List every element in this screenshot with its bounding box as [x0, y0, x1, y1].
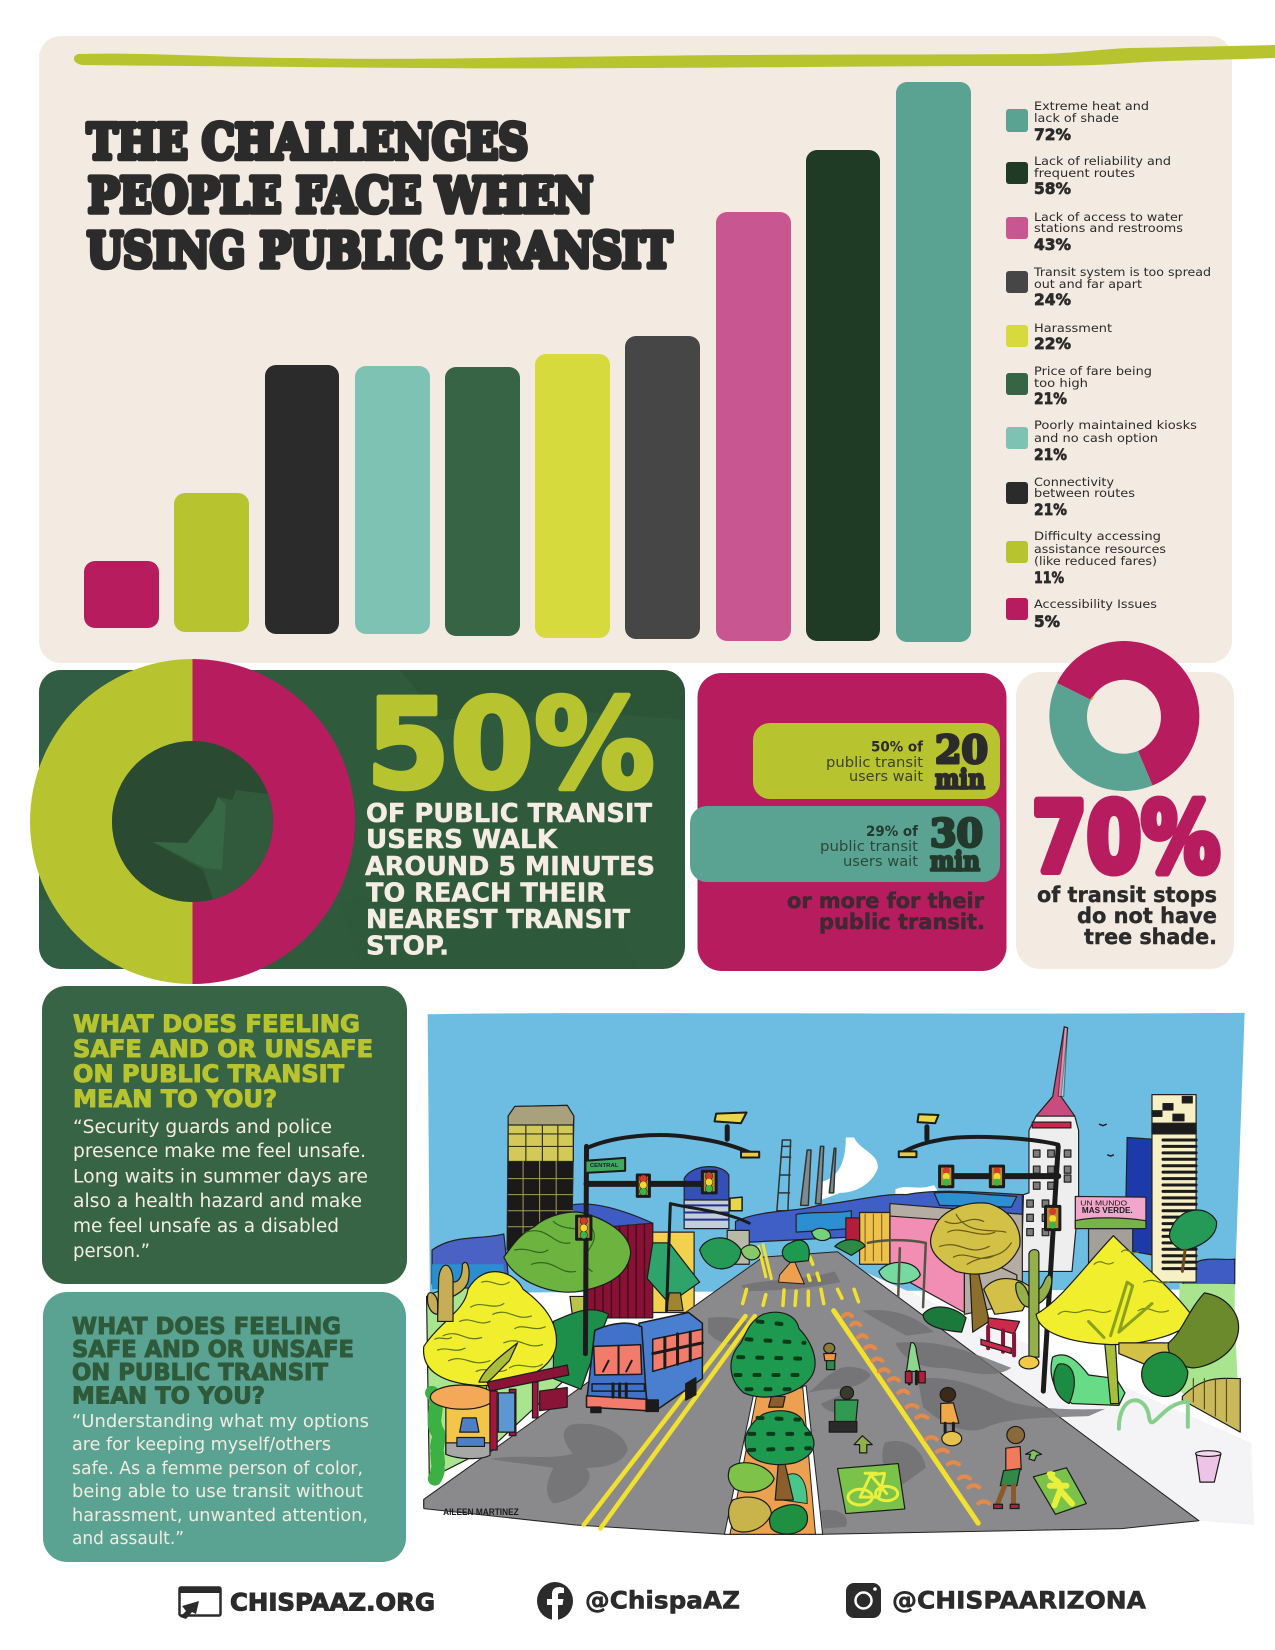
card: 30 minute wait: 30	[930, 810, 983, 856]
legend: frequent routes	[1034, 166, 1135, 180]
clouds	[821, 1137, 940, 1200]
traffic signals: left	[577, 1112, 926, 1354]
legend: 5%	[1034, 612, 1060, 631]
tree shadows on road	[490, 1271, 1105, 1529]
bike lane arrows	[854, 1436, 1042, 1461]
street sign: central: CENTRAL	[590, 1163, 619, 1168]
legend: Harassment	[1034, 321, 1113, 335]
quote one body: Long waits in summer days are	[73, 1166, 368, 1188]
legend: and no cash option	[1034, 431, 1158, 445]
building: white art deco tower	[1021, 1027, 1079, 1271]
wait caption: public transit.	[819, 910, 985, 934]
card: 30 minute wait: users wait	[843, 854, 919, 870]
trees and fence: right edge	[1119, 1293, 1240, 1432]
photo texture	[39, 670, 685, 969]
legend: Lack of access to water	[1034, 210, 1183, 224]
quote one heading	[73, 1010, 373, 1113]
walk description: OF PUBLIC TRANSIT	[366, 799, 652, 829]
card: 30 minute wait: public transit	[820, 839, 919, 855]
bar chart	[84, 82, 971, 642]
legend: 21%	[1034, 500, 1067, 519]
icon: facebook	[537, 1582, 573, 1620]
legend: Transit system is too spread	[1033, 265, 1211, 279]
legend: (like reduced fares)	[1034, 554, 1157, 568]
footer: website	[179, 1587, 435, 1619]
quote two body: are for keeping myself/others	[72, 1435, 331, 1455]
legend: 58%	[1034, 179, 1071, 198]
legend: between routes	[1034, 486, 1135, 500]
quote two heading	[72, 1314, 354, 1410]
buildings: right skyline	[1125, 1095, 1196, 1282]
legend: too high	[1034, 376, 1088, 390]
icon: instagram	[846, 1583, 881, 1618]
card: 20 minute wait	[753, 723, 1000, 799]
lime brush stroke	[74, 45, 1275, 68]
quote two heading: MEAN TO YOU?	[72, 1384, 265, 1410]
quote two heading: ON PUBLIC TRANSIT	[72, 1360, 328, 1386]
bench: red stop	[981, 1318, 1020, 1355]
card: 30 minute wait: min	[930, 846, 980, 878]
quote two body: safe. As a femme person of color,	[72, 1459, 363, 1479]
legend: 72%	[1034, 125, 1071, 144]
panel: 50 percent walk	[30, 659, 685, 984]
wait caption	[787, 889, 985, 934]
illustration: green street scene	[424, 1013, 1254, 1534]
card: 20 minute wait: min	[935, 764, 985, 796]
pink cup	[1196, 1451, 1221, 1482]
quote one body: person.”	[73, 1241, 150, 1262]
wait caption: or more for their	[787, 889, 985, 913]
billboard: un mundo mas verde	[1075, 1196, 1146, 1279]
quote two heading: SAFE AND OR UNSAFE	[72, 1337, 354, 1363]
panel: wait times	[690, 673, 1006, 971]
buildings: right low strip	[846, 1204, 1022, 1314]
walk description: AROUND 5 MINUTES	[365, 852, 655, 882]
footer: instagram	[846, 1583, 1146, 1618]
roadside ground	[424, 1252, 1254, 1525]
footer: facebook: @ChispaAZ	[585, 1586, 740, 1614]
birds	[1100, 1124, 1113, 1156]
title: PEOPLE FACE WHEN	[88, 168, 593, 224]
legend: Accessibility Issues	[1034, 597, 1157, 611]
legend: 21%	[1034, 445, 1067, 464]
median trees and shrubs	[728, 1312, 815, 1534]
cactus	[428, 1250, 1052, 1369]
panel: quote two	[43, 1292, 406, 1562]
vines: left edge	[432, 1393, 440, 1479]
bike rack	[1119, 1400, 1188, 1429]
walk description: TO REACH THEIR	[366, 878, 606, 908]
legend: Lack of reliability and	[1034, 154, 1171, 168]
legend	[1006, 99, 1211, 631]
shade caption: do not have	[1077, 904, 1217, 928]
panel: challenges bar chart	[39, 36, 1275, 663]
quote two heading: WHAT DOES FEELING	[72, 1314, 341, 1340]
panel: tree shade	[1016, 641, 1234, 969]
bus shelter and kiosk	[430, 1365, 569, 1459]
quote one heading: ON PUBLIC TRANSIT	[73, 1060, 345, 1088]
quote two body: “Understanding what my options	[72, 1412, 369, 1432]
title	[87, 114, 672, 279]
legend: 22%	[1034, 334, 1071, 353]
quote one body: “Security guards and police	[73, 1117, 332, 1138]
walk description: STOP.	[366, 932, 449, 962]
title: USING PUBLIC TRANSIT	[87, 223, 672, 279]
building: left black tower	[507, 1105, 574, 1250]
building: blue round tower	[684, 1167, 729, 1229]
quote two body: harassment, unwanted attention,	[72, 1506, 368, 1526]
quote two body: being able to use transit without	[72, 1482, 363, 1502]
quote one heading: MEAN TO YOU?	[73, 1085, 277, 1113]
quote one body: me feel unsafe as a disabled	[73, 1216, 339, 1237]
billboard: un mundo mas verde: MAS VERDE.	[1082, 1207, 1133, 1216]
walk description: USERS WALK	[366, 825, 558, 855]
donut chart: 70%	[1049, 641, 1199, 791]
card: 30 minute wait: 29% of	[866, 824, 919, 840]
footer: instagram: @CHISPAARIZONA	[892, 1586, 1146, 1614]
artist signature: AILEEN MARTINEZ	[443, 1507, 519, 1517]
quote one heading: SAFE AND OR UNSAFE	[73, 1035, 373, 1063]
legend: Price of fare being	[1034, 364, 1152, 378]
quote one heading: WHAT DOES FEELING	[73, 1010, 360, 1038]
quote two body	[72, 1412, 369, 1549]
road markings	[584, 1245, 978, 1529]
legend: out and far apart	[1034, 277, 1143, 291]
legend: Connectivity	[1034, 475, 1114, 489]
tree: yellow left	[424, 1272, 556, 1457]
legend: 11%	[1034, 568, 1064, 587]
legend: lack of shade	[1034, 111, 1119, 125]
legend: 24%	[1034, 290, 1071, 309]
icon: browser window	[179, 1587, 221, 1619]
mountains	[432, 1191, 1235, 1289]
big number 50%: 50%	[366, 673, 655, 817]
traffic signals: right	[899, 1114, 1060, 1391]
footer: facebook	[537, 1582, 740, 1620]
card: 20 minute wait: public transit	[826, 755, 924, 771]
legend: Extreme heat and	[1034, 99, 1149, 113]
footer: website: CHISPAAZ.ORG	[230, 1588, 435, 1616]
shade caption: of transit stops	[1037, 883, 1217, 907]
radio towers	[777, 1140, 836, 1211]
card: 30 minute wait	[690, 806, 1000, 882]
median strip	[724, 1259, 823, 1534]
title: THE CHALLENGES	[87, 114, 528, 170]
shade caption	[1037, 883, 1217, 949]
quote two body: and assault.”	[72, 1529, 184, 1549]
buildings: left low block	[587, 1223, 749, 1318]
card: 20 minute wait: 20	[935, 727, 988, 772]
trees: background	[504, 1203, 1217, 1389]
quote one body	[73, 1117, 368, 1262]
people	[824, 1343, 1025, 1509]
sky	[428, 1013, 1245, 1293]
walk description: NEAREST TRANSIT	[366, 905, 630, 935]
shade caption: tree shade.	[1084, 925, 1217, 949]
billboard: un mundo mas verde: UN MUNDO	[1080, 1199, 1127, 1207]
bike lane marking	[838, 1464, 1086, 1514]
road	[424, 1252, 1199, 1534]
bus	[587, 1312, 702, 1412]
quote one body: also a health hazard and make	[73, 1191, 362, 1212]
legend: 21%	[1034, 389, 1067, 408]
big number 70%: 70%	[1032, 782, 1220, 894]
card: 20 minute wait: users wait	[849, 769, 924, 785]
tree: yellow right	[1036, 1236, 1193, 1405]
legend: 43%	[1034, 235, 1071, 254]
walk description	[365, 799, 655, 962]
quote one body: presence make me feel unsafe.	[73, 1141, 366, 1162]
legend: stations and restrooms	[1034, 221, 1183, 235]
card: 20 minute wait: 50% of	[871, 740, 924, 756]
donut chart: 50%	[30, 659, 355, 984]
legend: assistance resources	[1034, 542, 1166, 556]
legend: Poorly maintained kiosks	[1034, 418, 1197, 432]
bike lane bollards	[843, 1314, 989, 1504]
legend: Difficulty accessing	[1034, 529, 1161, 543]
panel: quote one	[42, 986, 407, 1284]
